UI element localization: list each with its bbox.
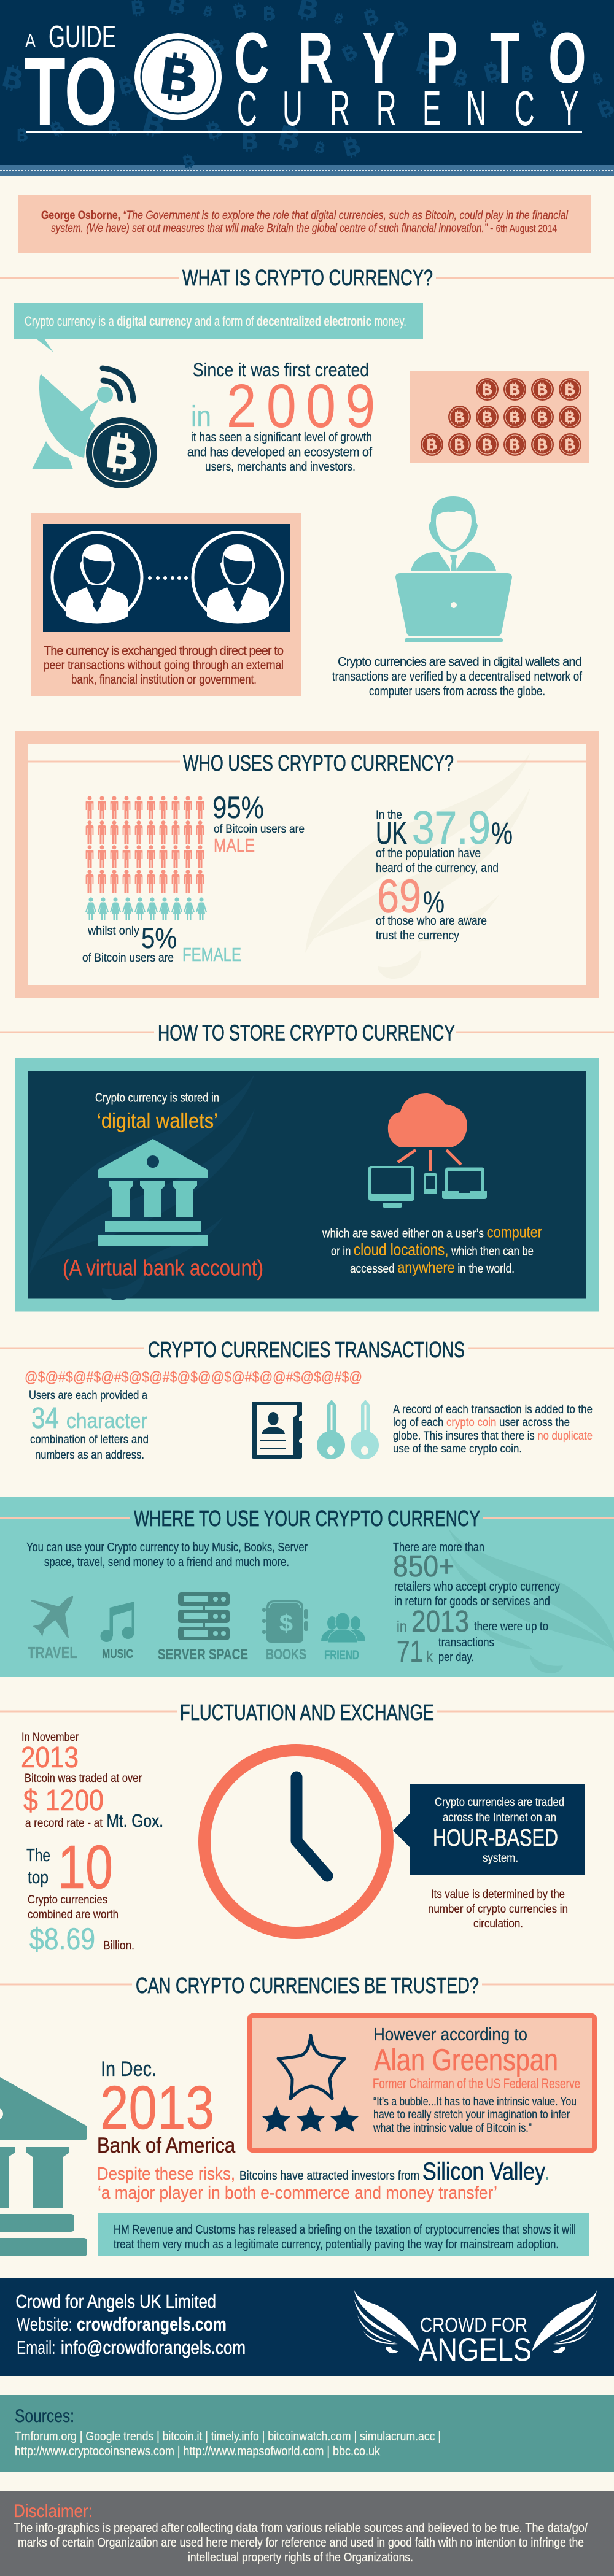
panel: peer to peer: [31, 513, 301, 696]
stat: 5 percent female: 5%: [141, 922, 177, 954]
stat: UK awareness: of those who are aware: [376, 914, 487, 928]
stat: UK awareness: 69: [377, 870, 421, 923]
text: greenspan quote: “It’s a bubble...It has to have intrinsic value. You: [373, 2096, 577, 2108]
text: 34 character address: Users are each provided a: [29, 1389, 147, 1402]
icon: left person: [52, 533, 142, 623]
text: 34 character address: 34: [31, 1402, 59, 1435]
text: contact details: Email:: [17, 2337, 55, 2358]
heading: where to use: WHERE TO USE YOUR CRYPTO CURRENCY: [134, 1506, 480, 1531]
panel: disclaimer: Disclaimer:: [14, 2501, 93, 2521]
stats: retailers and transactions: 71: [397, 1635, 423, 1668]
text: contact details: Website:: [17, 2313, 72, 2335]
heading: who uses: WHO USES CRYPTO CURRENCY?: [183, 750, 454, 776]
panel: disclaimer: [0, 2491, 614, 2576]
icon: books: $: [279, 1611, 293, 1637]
text: 34 character address: combination of letters and: [30, 1433, 149, 1446]
panel: george osborne quote: system. (We have) set out measures that will make Britain the global centre of such financial innovation.” - 6th August 2014: [51, 222, 557, 235]
stat: UK awareness: heard of the currency, and: [376, 862, 499, 875]
stat: UK awareness: 37.9: [412, 802, 491, 854]
stats: retailers and transactions: There are more than: [393, 1541, 484, 1554]
icon: books: BOOKS: [266, 1646, 306, 1663]
text: saved on computer or cloud: which are saved either on a user’s computer: [322, 1224, 542, 1241]
stats: 2013 bitcoin price: $ 1200: [23, 1784, 104, 1817]
text: greenspan quote: have to really stretch your imagination to infer: [373, 2108, 570, 2121]
icon: books: [262, 1600, 308, 1663]
text: despite these risks: ‘a major player in both e-commerce and money transfer’: [98, 2183, 497, 2203]
stats: top 10 worth: 10: [58, 1833, 113, 1902]
icon: large bank: [0, 2077, 87, 2256]
icon: bank: [98, 1139, 208, 1246]
text block: since 2009: and has developed an ecosystem of: [187, 445, 372, 459]
text: wallets and network: [332, 655, 582, 698]
title: a guide to: A: [25, 30, 36, 52]
stat: UK awareness: [376, 802, 513, 943]
stats: bank of america: Bank of America: [97, 2134, 235, 2158]
panel: bitcoin coins: [410, 371, 589, 463]
stats: retailers and transactions: 850+: [393, 1550, 454, 1583]
heading: transactions: CRYPTO CURRENCIES TRANSACTIONS: [148, 1337, 465, 1362]
text: contact details: Crowd for Angels UK Limited: [16, 2291, 216, 2312]
icon: music: MUSIC: [102, 1647, 133, 1661]
stat: 5 percent female: FEMALE: [182, 944, 241, 965]
heading: fluctuation and exchange: [0, 1700, 614, 1725]
panel: disclaimer: intellectual property rights of the Organizations.: [188, 2551, 413, 2564]
icon: connecting dots: [148, 576, 188, 580]
text: 34 character address: numbers as an address.: [35, 1449, 144, 1462]
text: peer to peer description: [44, 644, 284, 687]
icon: travel: TRAVEL: [28, 1643, 77, 1662]
heading: how to store: HOW TO STORE CRYPTO CURRENCY: [158, 1020, 455, 1046]
stats: top 10 worth: The: [26, 1846, 50, 1865]
text: record of each transaction: globe. This insures that there is no duplicate: [393, 1430, 593, 1443]
stat: 95 percent male: 95%: [212, 790, 264, 825]
heading: fluctuation and exchange: FLUCTUATION AND EXCHANGE: [180, 1700, 434, 1725]
panel: sources: [0, 2395, 614, 2472]
callout: hour based: [393, 1784, 585, 1875]
text: virtual bank account: (A virtual bank account): [63, 1255, 263, 1280]
icon: friend: [321, 1613, 365, 1662]
panel: sources: http://www.cryptocoinsnews.com | http://www.mapsofworld.com | bbc.co.uk: [15, 2445, 381, 2458]
text: saved on computer or cloud: accessed anywhere in the world.: [350, 1259, 515, 1276]
text block: since 2009: it has seen a significant level of growth: [191, 431, 372, 444]
stat: UK awareness: %: [423, 885, 445, 919]
callout: hour based: HOUR-BASED: [433, 1825, 558, 1851]
text: contact details: [16, 2291, 246, 2358]
stats: retailers and transactions: retailers who accept crypto currency: [394, 1580, 560, 1594]
heading: what is crypto currency: [0, 265, 614, 290]
title: crypto: CRYPTO: [234, 18, 586, 99]
stat: 5 percent female: whilst only: [87, 925, 139, 938]
text: saved on computer or cloud: [322, 1224, 542, 1276]
icon: right person: [193, 533, 282, 623]
text: despite these risks: .: [545, 2158, 549, 2185]
stats: 2013 bitcoin price: Bitcoin was traded at over: [25, 1772, 142, 1785]
callout: definition bubble: [14, 303, 423, 352]
icon: keys: [317, 1400, 379, 1459]
panel: sources: Tmforum.org | Google trends | bitcoin.it | timely.info | bitcoinwatch.com | simulacrum.acc |: [15, 2430, 441, 2443]
text: despite these risks: Bitcoins have attracted investors from: [239, 2169, 419, 2183]
text: despite these risks: [97, 2158, 549, 2203]
stat: UK awareness: trust the currency: [376, 929, 459, 943]
icon: server space: [158, 1592, 248, 1663]
text: saved on computer or cloud: or in cloud locations, which then can be: [331, 1241, 534, 1259]
stats: retailers and transactions: transactions: [438, 1636, 494, 1649]
text: value determined: [428, 1888, 568, 1930]
stats: retailers and transactions: k: [426, 1648, 433, 1665]
stats: top 10 worth: top: [28, 1868, 49, 1888]
stat: UK awareness: In the: [376, 809, 402, 822]
text: peer to peer description: The currency is exchanged through direct peer to: [44, 644, 284, 658]
stats: top 10 worth: $8.69: [29, 1922, 95, 1956]
stats: bank of america: 2013: [100, 2073, 214, 2142]
text: record of each transaction: use of the same crypto coin.: [393, 1443, 522, 1456]
text: wallets and network: Crypto currencies are saved in digital wallets and: [338, 655, 582, 669]
text: peer to peer description: bank, financial institution or government.: [71, 673, 257, 687]
icon: satellite dish with bitcoin: [32, 368, 157, 488]
panel: alan greenspan quote: [250, 2016, 594, 2150]
panel: george osborne quote: [18, 195, 591, 253]
stats: 2013 bitcoin price: [21, 1731, 163, 1831]
callout: definition bubble: Crypto currency is a digital currency and a form of decentralized electronic money.: [25, 314, 406, 329]
text: uses: [26, 1541, 308, 1569]
heading: transactions: [0, 1337, 614, 1362]
stats: top 10 worth: [26, 1833, 134, 1956]
stat: 5 percent female: of Bitcoin users are: [82, 952, 174, 965]
text block: since 2009: [187, 359, 375, 474]
panel: sources: Sources:: [15, 2406, 74, 2426]
logo: crowd for angels: ANGELS: [419, 2332, 532, 2368]
callout: hour based: across the Internet on an: [443, 1811, 556, 1824]
text: record of each transaction: log of each crypto coin user across the: [393, 1416, 570, 1429]
stat: UK awareness: %: [491, 816, 513, 850]
text: digital wallets: Crypto currency is stored in: [95, 1091, 219, 1105]
text: greenspan quote: what the intrinsic value of Bitcoin is.”: [373, 2122, 532, 2135]
stats: top 10 worth: Crypto currencies: [28, 1894, 107, 1907]
panel: header banner: [0, 0, 614, 176]
heading: how to store: [0, 1020, 614, 1046]
stats: 2013 bitcoin price: Mt. Gox.: [107, 1811, 163, 1831]
text: uses: You can use your Crypto currency to buy Music, Books, Server: [26, 1541, 308, 1554]
icon: bitcoin coin: [134, 33, 222, 120]
text block: since 2009: users, merchants and investors.: [205, 460, 356, 474]
text: greenspan quote: [373, 2025, 580, 2135]
title: a guide to: [24, 19, 117, 145]
logo: crowd for angels: CROWD FOR: [420, 2313, 527, 2336]
stats: 2013 bitcoin price: 2013: [21, 1741, 79, 1774]
panel: who uses crypto currency: [15, 731, 599, 998]
text: character string: @$@#$@#$@#$@$@#$@$@@$@#$@@#$@$@#$@: [25, 1369, 362, 1386]
icon: server space: SERVER SPACE: [158, 1646, 248, 1663]
text: value determined: number of crypto currencies in: [428, 1903, 568, 1916]
stat: UK awareness: of the population have: [376, 847, 481, 860]
title: currency: CURRENCY: [237, 81, 578, 136]
panel: hmrc briefing: [98, 2213, 589, 2256]
stat: 95 percent male: of Bitcoin users are: [214, 823, 305, 836]
stat: 5 percent female: [82, 922, 241, 965]
text: record of each transaction: A record of each transaction is added to the: [393, 1403, 593, 1416]
text: value determined: circulation.: [473, 1918, 523, 1930]
text: uses: space, travel, send money to a friend and much more.: [44, 1556, 289, 1569]
text: record of each transaction: [393, 1403, 593, 1456]
title: a guide to: TO: [24, 38, 117, 145]
chart: female icons: [85, 897, 208, 922]
stats: retailers and transactions: 2013: [411, 1605, 469, 1638]
icon: clock: [204, 1750, 387, 1933]
text: contact details: crowdforangels.com: [77, 2313, 227, 2335]
stat: UK awareness: UK: [376, 816, 407, 850]
text: greenspan quote: However according to: [373, 2025, 527, 2045]
stat: 95 percent male: [212, 790, 305, 856]
heading: what is crypto currency: WHAT IS CRYPTO CURRENCY?: [182, 265, 433, 290]
text: value determined: Its value is determined by the: [431, 1888, 565, 1901]
stats: retailers and transactions: there were up to: [474, 1620, 548, 1633]
panel: how to store: ‘digital wallets’: [97, 1109, 218, 1133]
icon: stars: [262, 2035, 359, 2132]
icon: id card: [252, 1402, 302, 1459]
text: contact details: info@crowdforangels.com: [61, 2337, 246, 2358]
stats: retailers and transactions: per day.: [438, 1651, 474, 1664]
icon: music: [101, 1602, 134, 1661]
text: 34 character address: [29, 1389, 149, 1462]
icon: travel: [28, 1596, 77, 1662]
heading: can crypto currencies be trusted: CAN CRYPTO CURRENCIES BE TRUSTED?: [136, 1973, 479, 1998]
chart: male icons: [84, 796, 206, 894]
stats: top 10 worth: Billion.: [103, 1939, 134, 1953]
panel: how to store: [15, 1058, 599, 1312]
icon: friend: FRIEND: [324, 1648, 359, 1662]
logo: crowd for angels: [354, 2290, 597, 2368]
text: despite these risks: Silicon Valley: [422, 2158, 545, 2185]
stats: bank of america: In Dec.: [101, 2057, 157, 2081]
icon: cloud and devices: [368, 1093, 487, 1208]
stat: 95 percent male: MALE: [214, 835, 255, 856]
panel: footer contact: [0, 2278, 614, 2376]
text: wallets and network: computer users from across the globe.: [369, 685, 545, 698]
text: 34 character address: character: [66, 1409, 147, 1433]
panel: where to use: [0, 1497, 614, 1677]
text: greenspan quote: Alan Greenspan: [374, 2043, 558, 2077]
text: peer to peer description: peer transactions without going through an external: [44, 659, 284, 673]
text: despite these risks: Despite these risks,: [97, 2164, 235, 2184]
heading: who uses: [28, 750, 586, 776]
stats: retailers and transactions: in: [397, 1618, 407, 1635]
callout: hour based: Crypto currencies are traded: [435, 1796, 564, 1809]
stats: 2013 bitcoin price: In November: [21, 1731, 79, 1744]
text block: since 2009: Since it was first created: [193, 359, 369, 380]
callout: hour based: system.: [483, 1852, 518, 1865]
stats: bank of america: [97, 2057, 235, 2158]
title: a guide to: GUIDE: [49, 19, 116, 54]
text block: since 2009: 2009: [227, 372, 375, 440]
stats: retailers and transactions: [393, 1541, 560, 1668]
icon: person with laptop: [395, 496, 512, 642]
text block: since 2009: in: [191, 401, 211, 433]
stats: retailers and transactions: in return for goods or services and: [394, 1595, 550, 1608]
stats: top 10 worth: combined are worth: [28, 1908, 119, 1921]
stats: 2013 bitcoin price: a record rate - at: [25, 1817, 103, 1830]
